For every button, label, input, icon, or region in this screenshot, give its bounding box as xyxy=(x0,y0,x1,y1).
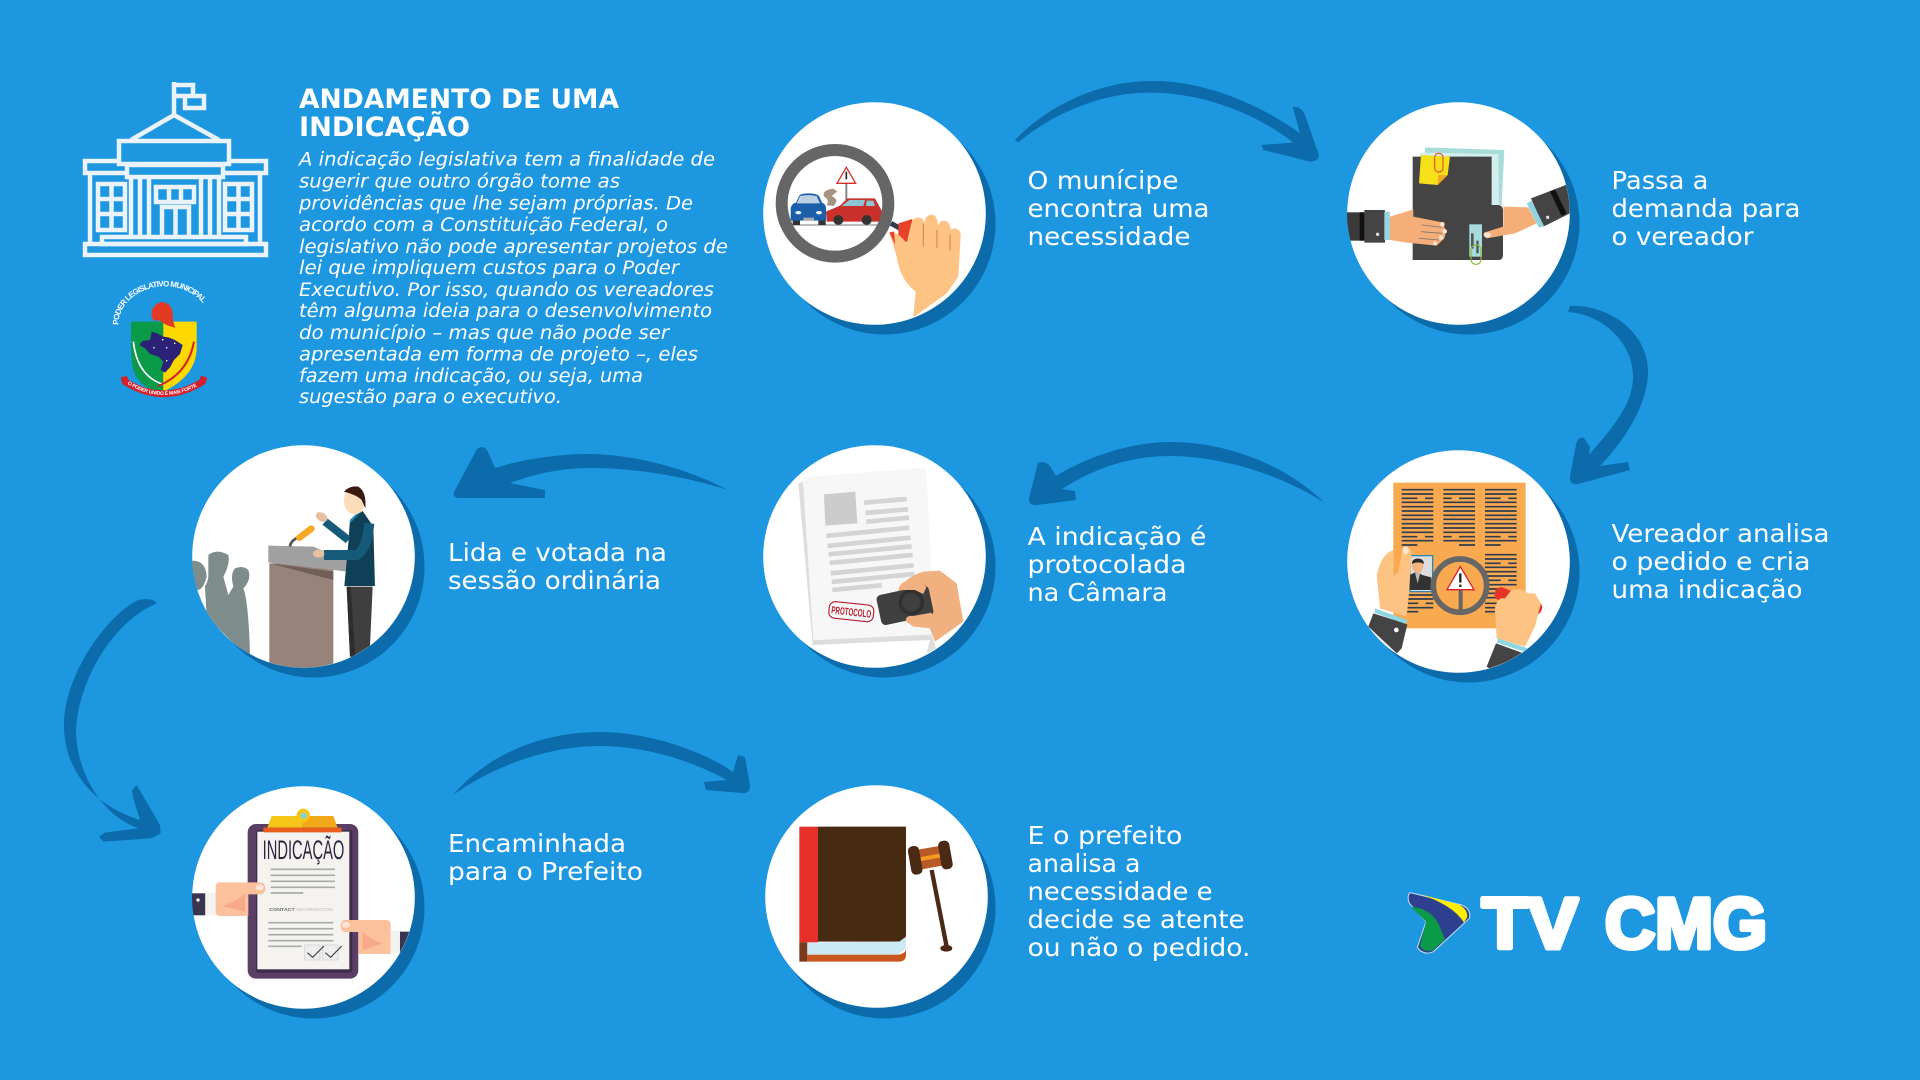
infographic canvas xyxy=(64,81,1828,1018)
caption: Vereador analisa xyxy=(1612,519,1830,548)
arrow: step 6 to step 7 xyxy=(453,732,750,795)
circle with shadow xyxy=(765,785,996,1018)
logo: TV CMG: CMG xyxy=(1605,885,1767,964)
icon: clipboard with hands: INDICAÇÃO xyxy=(263,835,344,865)
arrow: step 2 to step 3 xyxy=(1568,306,1648,484)
icon: magnifier over car crash xyxy=(782,150,961,317)
caption: uma indicação xyxy=(1612,575,1802,604)
circle with shadow xyxy=(1347,450,1580,682)
icon: legislative building xyxy=(85,82,266,255)
arrow: step 4 to step 5 xyxy=(454,447,728,498)
caption: na Câmara xyxy=(1028,578,1168,607)
caption: A indicação é xyxy=(1028,522,1206,551)
arrow: step 5 to step 6 xyxy=(64,599,161,842)
arrow: step 3 to step 4 xyxy=(1029,442,1325,505)
caption: necessidade e xyxy=(1028,877,1212,906)
step 3: councillor analyses xyxy=(1347,450,1830,682)
arrow: step 1 to step 2 xyxy=(1015,81,1319,162)
step 2: passes to councillor xyxy=(1347,102,1800,334)
step 7: mayor decides xyxy=(765,785,1250,1018)
intro paragraph xyxy=(298,150,728,408)
caption: demanda para xyxy=(1612,194,1800,223)
caption xyxy=(448,538,667,595)
title: INDICAÇÃO xyxy=(299,111,470,143)
intro paragraph: sugestão para o executivo. xyxy=(299,387,562,408)
caption xyxy=(1612,166,1800,251)
icon: document under magnifier xyxy=(1368,483,1544,670)
step 5: read and voted xyxy=(192,445,667,678)
step 4: filed at the chamber xyxy=(763,445,1206,678)
step 1: citizen finds a need xyxy=(763,102,1210,334)
circle with shadow xyxy=(1347,102,1580,334)
circle with shadow xyxy=(192,445,424,678)
icon: clipboard with hands: CONTACT INFORMATION xyxy=(269,907,333,913)
caption: encontra uma xyxy=(1028,194,1210,223)
icon: document with stamp xyxy=(798,467,963,653)
icon: municipal seal xyxy=(112,280,208,398)
caption: Passa a xyxy=(1612,166,1708,195)
caption xyxy=(1028,821,1250,962)
icon: law book and gavel xyxy=(799,827,953,962)
intro paragraph: lei que impliquem custos para o Poder xyxy=(299,258,680,279)
caption: protocolada xyxy=(1028,550,1186,579)
icon: speaker at podium xyxy=(192,486,375,670)
intro paragraph: sugerir que outro órgão tome as xyxy=(299,172,620,192)
intro paragraph: A indicação legislativa tem a finalidade de xyxy=(298,150,715,170)
logo mark xyxy=(1408,893,1470,953)
caption: o vereador xyxy=(1612,222,1754,251)
circle with shadow xyxy=(763,102,996,334)
circle with shadow xyxy=(763,445,996,678)
intro paragraph: do município – mas que não pode ser xyxy=(299,323,670,344)
caption: o pedido e cria xyxy=(1612,547,1810,576)
intro paragraph: legislativo não pode apresentar projetos de xyxy=(299,237,728,258)
caption: Encaminhada xyxy=(448,829,626,858)
caption: decide se atente xyxy=(1028,905,1244,934)
caption xyxy=(448,829,643,886)
intro paragraph: Executivo. Por isso, quando os vereadores xyxy=(299,280,714,301)
logo: TV CMG xyxy=(1408,885,1767,964)
caption: ou não o pedido. xyxy=(1028,933,1250,962)
caption: Lida e votada na xyxy=(448,538,667,567)
circle with shadow xyxy=(192,786,424,1018)
intro paragraph: apresentada em forma de projeto –, eles xyxy=(299,344,698,366)
title xyxy=(299,84,619,143)
icon: clipboard with hands xyxy=(192,809,417,979)
intro paragraph: providências que lhe sejam próprias. De xyxy=(298,194,693,214)
intro paragraph: acordo com a Constituição Federal, o xyxy=(299,215,668,236)
caption: sessão ordinária xyxy=(448,566,661,595)
logo: TV CMG: TV xyxy=(1482,885,1578,964)
caption: E o prefeito xyxy=(1028,821,1182,850)
caption xyxy=(1028,166,1210,251)
caption: analisa a xyxy=(1028,849,1140,878)
caption xyxy=(1028,522,1206,607)
caption xyxy=(1612,519,1830,604)
title: ANDAMENTO DE UMA xyxy=(299,84,619,115)
caption: para o Prefeito xyxy=(448,857,643,886)
icon: hands passing folder xyxy=(1347,147,1570,264)
caption: O munícipe xyxy=(1028,166,1178,195)
caption: necessidade xyxy=(1028,222,1190,251)
intro paragraph: fazem uma indicação, ou seja, uma xyxy=(299,366,643,387)
step 6: sent to mayor xyxy=(192,786,643,1018)
icon: municipal seal: O PODER UNIDO É MAIS FORTE xyxy=(128,382,197,395)
intro paragraph: têm alguma ideia para o desenvolvimento xyxy=(299,301,712,322)
icon: municipal seal: PODER LEGISLATIVO MUNICIPAL xyxy=(112,280,205,324)
icon: document with stamp: PROTOCOLO xyxy=(831,605,872,621)
